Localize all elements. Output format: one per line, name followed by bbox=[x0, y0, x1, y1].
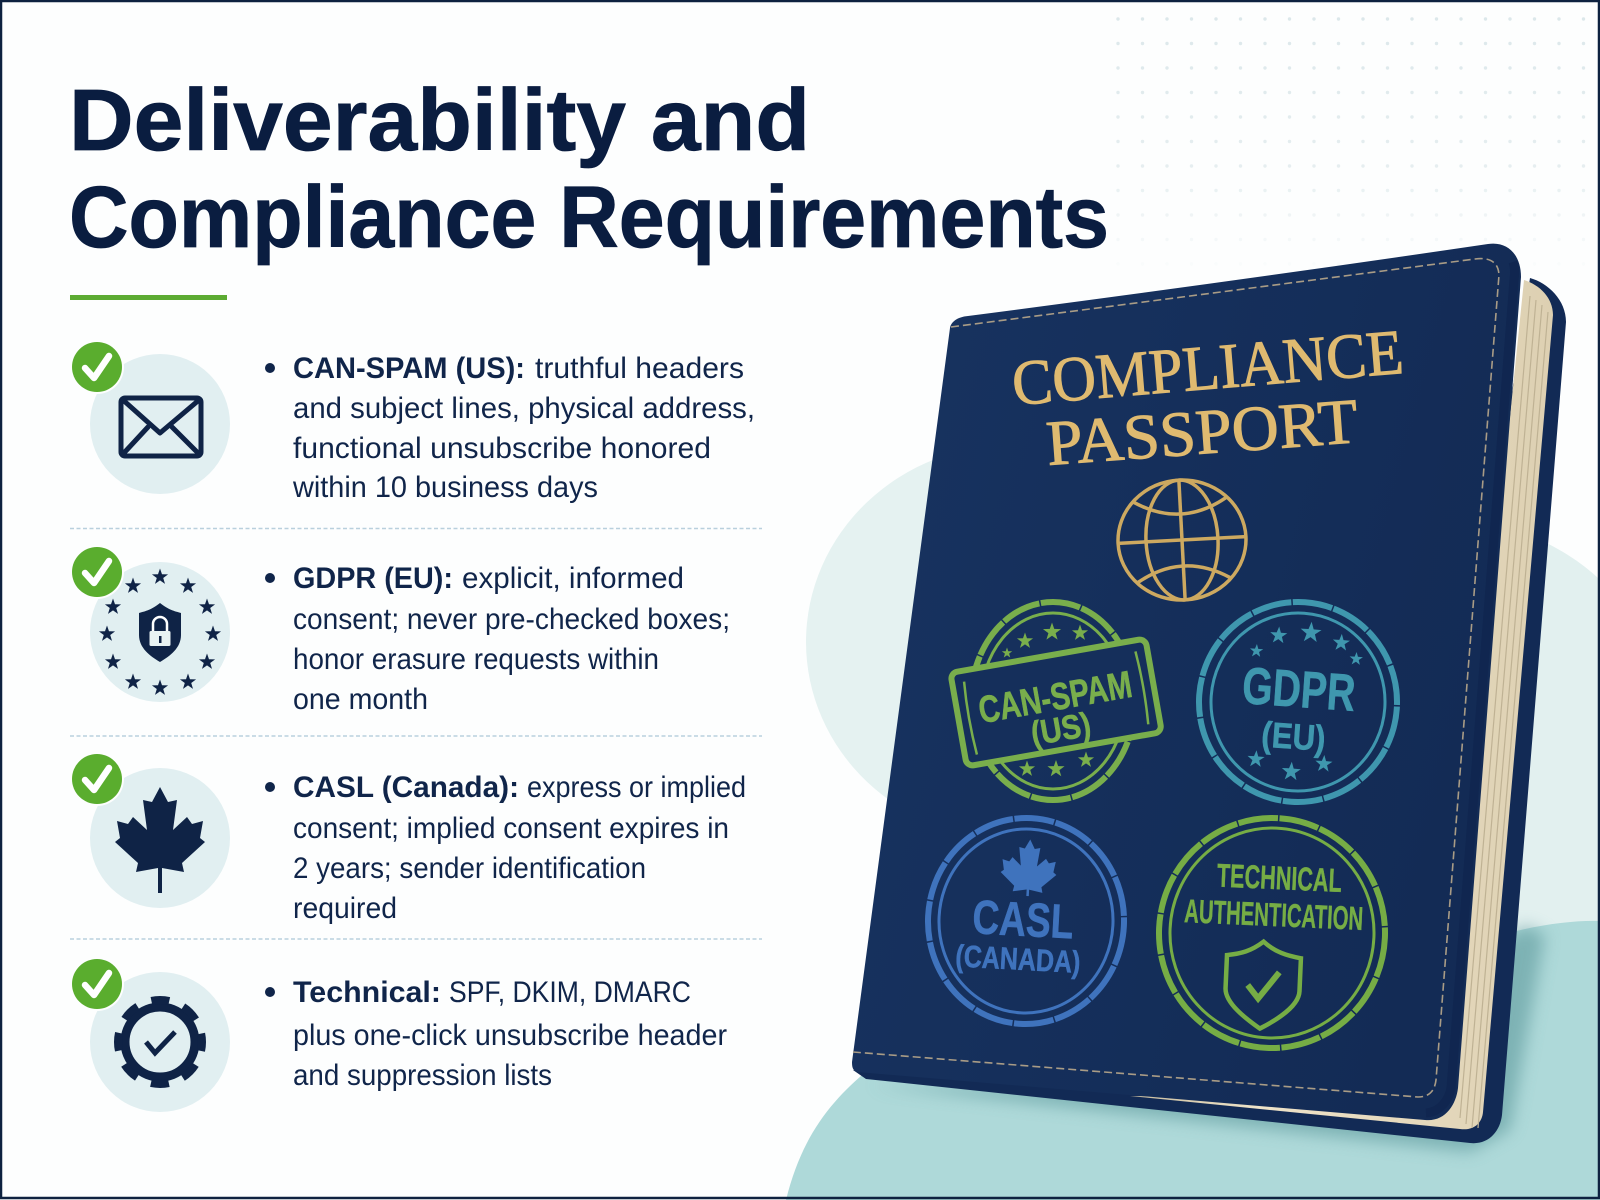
text: GDPR: honor erasure requests within bbox=[293, 643, 659, 676]
stamp: GDPR: GDPR bbox=[1240, 657, 1357, 723]
bullet bbox=[265, 782, 275, 792]
text: Technical: plus one-click unsubscribe header bbox=[293, 1019, 727, 1052]
cast shadow bbox=[870, 925, 1545, 1152]
stamp: Technical Authentication: AUTHENTICATION bbox=[1184, 892, 1364, 937]
text: GDPR: explicit, informed bbox=[462, 562, 684, 595]
page edge lines bbox=[1460, 296, 1548, 1128]
heading: COMPLIANCE PASSPORT bbox=[1009, 316, 1406, 479]
text: CASL: CASL (Canada): bbox=[293, 771, 519, 804]
divider bbox=[70, 735, 762, 737]
icon: envelope bbox=[121, 398, 201, 456]
text: GDPR: one month bbox=[293, 683, 428, 716]
icon: shield check bbox=[1224, 940, 1302, 1030]
text: CASL: consent; implied consent expires in bbox=[293, 812, 729, 845]
icon disc bbox=[90, 768, 230, 908]
heading: COMPLIANCE PASSPORT: COMPLIANCE bbox=[1009, 316, 1406, 419]
text: CASL: express or implied bbox=[527, 771, 746, 804]
title bbox=[69, 72, 1109, 266]
icon disc bbox=[90, 562, 230, 702]
text: CASL: 2 years; sender identification bbox=[293, 852, 646, 885]
bullet bbox=[265, 573, 275, 583]
check badge bbox=[70, 957, 124, 1011]
bullet bbox=[265, 987, 275, 997]
pale circle behind passport bbox=[806, 444, 1224, 840]
icon: maple leaf bbox=[115, 787, 205, 893]
stamp: GDPR: (EU) bbox=[1260, 714, 1327, 759]
text: Technical bbox=[293, 976, 727, 1092]
text: GDPR bbox=[293, 562, 730, 716]
check badge bbox=[70, 545, 124, 599]
front cover bbox=[852, 244, 1521, 1120]
cover edge band bbox=[1426, 262, 1515, 1113]
text: Technical: SPF, DKIM, DMARC bbox=[449, 976, 691, 1009]
title: Deliverability and bbox=[69, 72, 810, 169]
icon disc bbox=[90, 354, 230, 494]
check badge bbox=[70, 340, 124, 394]
icon: EU stars ring bbox=[99, 568, 221, 695]
pages block bbox=[1130, 280, 1553, 1129]
stamp: CASL: CASL bbox=[971, 891, 1075, 949]
text: CAN-SPAM: within 10 business days bbox=[292, 471, 598, 504]
text: CAN-SPAM: truthful headers bbox=[535, 352, 744, 385]
divider bbox=[70, 528, 762, 530]
passport illustration bbox=[852, 244, 1566, 1152]
bullet bbox=[265, 363, 275, 373]
text: GDPR: consent; never pre-checked boxes; bbox=[293, 603, 730, 636]
stamp: Technical Authentication: TECHNICAL bbox=[1216, 857, 1343, 899]
pale blob right of passport bbox=[1480, 520, 1600, 1000]
row: GDPR bbox=[70, 545, 730, 716]
text: CAN-SPAM: functional unsubscribe honored bbox=[293, 432, 711, 465]
stamp: CAN-SPAM: (US) bbox=[1028, 706, 1094, 753]
text: CAN-SPAM bbox=[292, 352, 755, 504]
text: CAN-SPAM: CAN-SPAM (US): bbox=[293, 352, 525, 385]
icon: gear with check bbox=[118, 1000, 202, 1084]
title: Compliance Requirements bbox=[69, 169, 1109, 266]
stamp: CASL bbox=[923, 813, 1129, 1029]
row: CAN-SPAM bbox=[70, 340, 755, 504]
stamp: GDPR bbox=[1192, 595, 1404, 809]
row: Technical bbox=[70, 957, 727, 1112]
icon: gold globe bbox=[1115, 477, 1249, 603]
text: Technical: Technical: bbox=[293, 976, 441, 1009]
text: GDPR: GDPR (EU): bbox=[293, 562, 453, 595]
text: CASL bbox=[293, 771, 746, 925]
text: Technical: and suppression lists bbox=[293, 1059, 552, 1092]
stamp: CASL: (CANADA) bbox=[955, 938, 1081, 980]
stamp: CAN-SPAM: CAN-SPAM bbox=[975, 664, 1135, 732]
check badge bbox=[70, 752, 124, 806]
divider bbox=[70, 938, 762, 940]
stamp: CAN-SPAM bbox=[950, 602, 1162, 800]
text: CASL: required bbox=[293, 892, 397, 925]
cover stitching bbox=[853, 259, 1499, 1097]
row: CASL bbox=[70, 752, 746, 925]
back cover bbox=[853, 278, 1566, 1143]
dot pattern bbox=[1116, 17, 1586, 241]
icon: shield lock bbox=[139, 603, 181, 662]
icon disc bbox=[90, 972, 230, 1112]
text: CAN-SPAM: and subject lines, physical address, bbox=[293, 392, 755, 425]
stamp: Technical Authentication bbox=[1154, 813, 1390, 1053]
green accent rule bbox=[70, 295, 227, 300]
heading: COMPLIANCE PASSPORT: PASSPORT bbox=[1044, 385, 1360, 479]
teal ground shape bbox=[786, 921, 1600, 1200]
